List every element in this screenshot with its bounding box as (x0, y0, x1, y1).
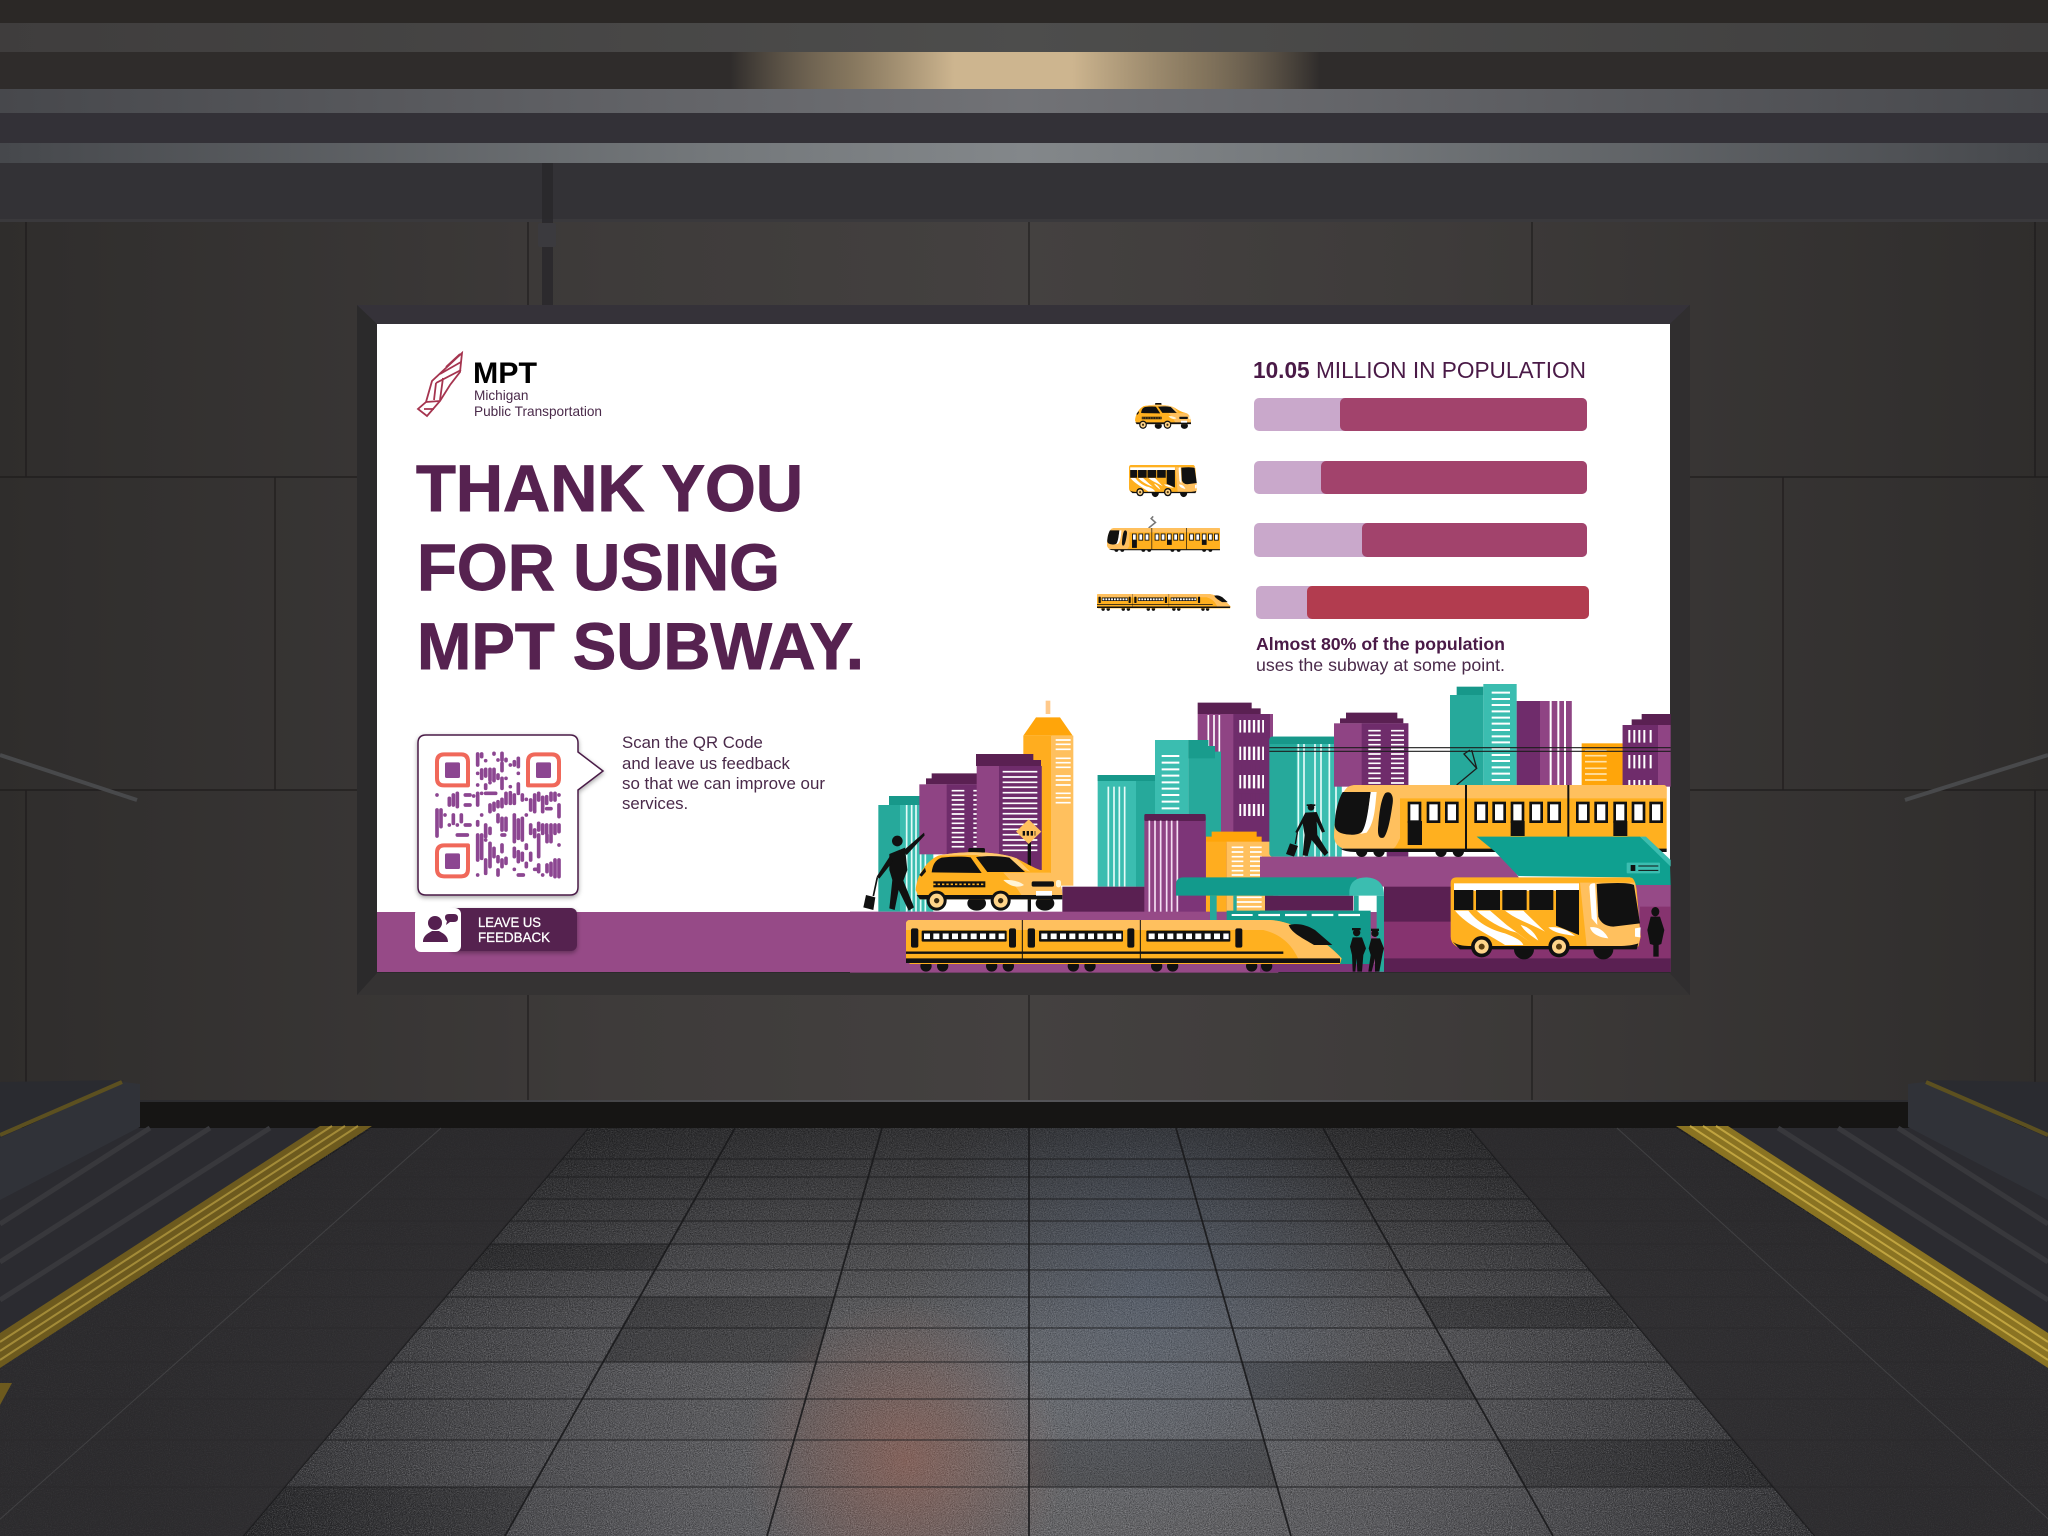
bus (1451, 877, 1641, 959)
building: teal stripes (1269, 737, 1342, 857)
QR code (437, 753, 559, 877)
building: teal middle (1098, 775, 1155, 887)
feedback button: FEEDBACK (478, 929, 551, 945)
ground ledge (1062, 887, 1149, 913)
building: purple front (1144, 814, 1206, 920)
building: teal left (878, 796, 933, 912)
chart caption: Almost 80% of the population (1256, 634, 1505, 654)
building: purple back (1517, 701, 1572, 787)
icon: person with speech bubble (423, 914, 458, 942)
floor (0, 1100, 2048, 1536)
steps and handrail: right (1905, 755, 2048, 1200)
logo (418, 353, 602, 419)
title: THANK YOU (416, 451, 803, 525)
feedback button (415, 908, 577, 952)
title: FOR USING (417, 530, 780, 604)
title (416, 451, 864, 683)
overhead wires (1269, 748, 1671, 751)
steps and handrail: left (0, 755, 140, 1200)
shelter (1260, 877, 1384, 972)
icon: taxi (1135, 403, 1191, 429)
logo wordmark (473, 357, 602, 419)
city scene: left (850, 701, 1278, 973)
ground (850, 912, 1278, 973)
yellow tactile strip: left (0, 1126, 372, 1405)
bar: high-speed train (1256, 586, 1589, 619)
billboard poster (377, 324, 1671, 973)
title: MPT SUBWAY. (417, 609, 864, 683)
person hailing taxi (863, 833, 925, 911)
pantograph (1457, 750, 1477, 785)
ceiling (0, 0, 2048, 222)
chart caption: uses the subway at some point. (1256, 655, 1505, 675)
high-speed train (906, 920, 1342, 972)
building: purple dashes (1334, 713, 1408, 787)
bar: taxi (1254, 398, 1587, 431)
tram (1334, 785, 1667, 857)
QR card (418, 735, 603, 895)
taxi sign (1016, 819, 1041, 912)
building: purple tall (976, 754, 1042, 870)
billboard frame (357, 305, 1690, 995)
person with suitcase (1286, 804, 1328, 857)
tower: orange (1023, 701, 1073, 886)
bar: tram (1254, 523, 1587, 557)
woman silhouette (1647, 907, 1664, 957)
logo wordmark: Michigan (474, 388, 528, 403)
purple ground strip (377, 912, 1670, 972)
icon: high-speed train (1097, 594, 1231, 611)
tiled wall (0, 163, 2048, 1104)
feedback button: LEAVE US (478, 914, 541, 930)
shelter canopy (1176, 877, 1278, 896)
QR instructions (622, 733, 825, 813)
yellow tactile strip: right (1676, 1126, 2048, 1368)
QR instructions: services. (622, 794, 688, 813)
city scene: right (1260, 684, 1671, 972)
building: purple tall back (1198, 703, 1273, 920)
building: orange back (1582, 743, 1623, 787)
chart caption (1256, 634, 1505, 675)
building: teal stepped (1155, 740, 1221, 837)
chart heading: 10.05 MILLION IN POPULATION (1253, 357, 1586, 383)
taxi (916, 848, 1062, 911)
icon: bus (1129, 465, 1197, 497)
waiting passengers (1350, 928, 1384, 972)
building: purple (919, 773, 990, 854)
bar: bus (1254, 461, 1587, 494)
QR instructions: so that we can improve our (622, 774, 825, 793)
teal elevated platform (1477, 837, 1671, 885)
building base behind tram (1387, 847, 1408, 857)
QR instructions: and leave us feedback (622, 754, 791, 773)
building: orange front (1206, 832, 1273, 922)
logo wordmark: Public Transportation (474, 404, 602, 419)
platform sign (1227, 911, 1278, 921)
ground: upper (1260, 857, 1522, 887)
speech bubble card (418, 735, 603, 895)
ground: lower (1384, 885, 1671, 972)
logo wordmark: MPT (473, 357, 537, 390)
icon: tram (1107, 516, 1220, 552)
building: teal back (1450, 684, 1517, 787)
icon: wing logo (418, 353, 462, 416)
QR instructions: Scan the QR Code (622, 733, 763, 752)
building: purple right (1623, 714, 1671, 787)
